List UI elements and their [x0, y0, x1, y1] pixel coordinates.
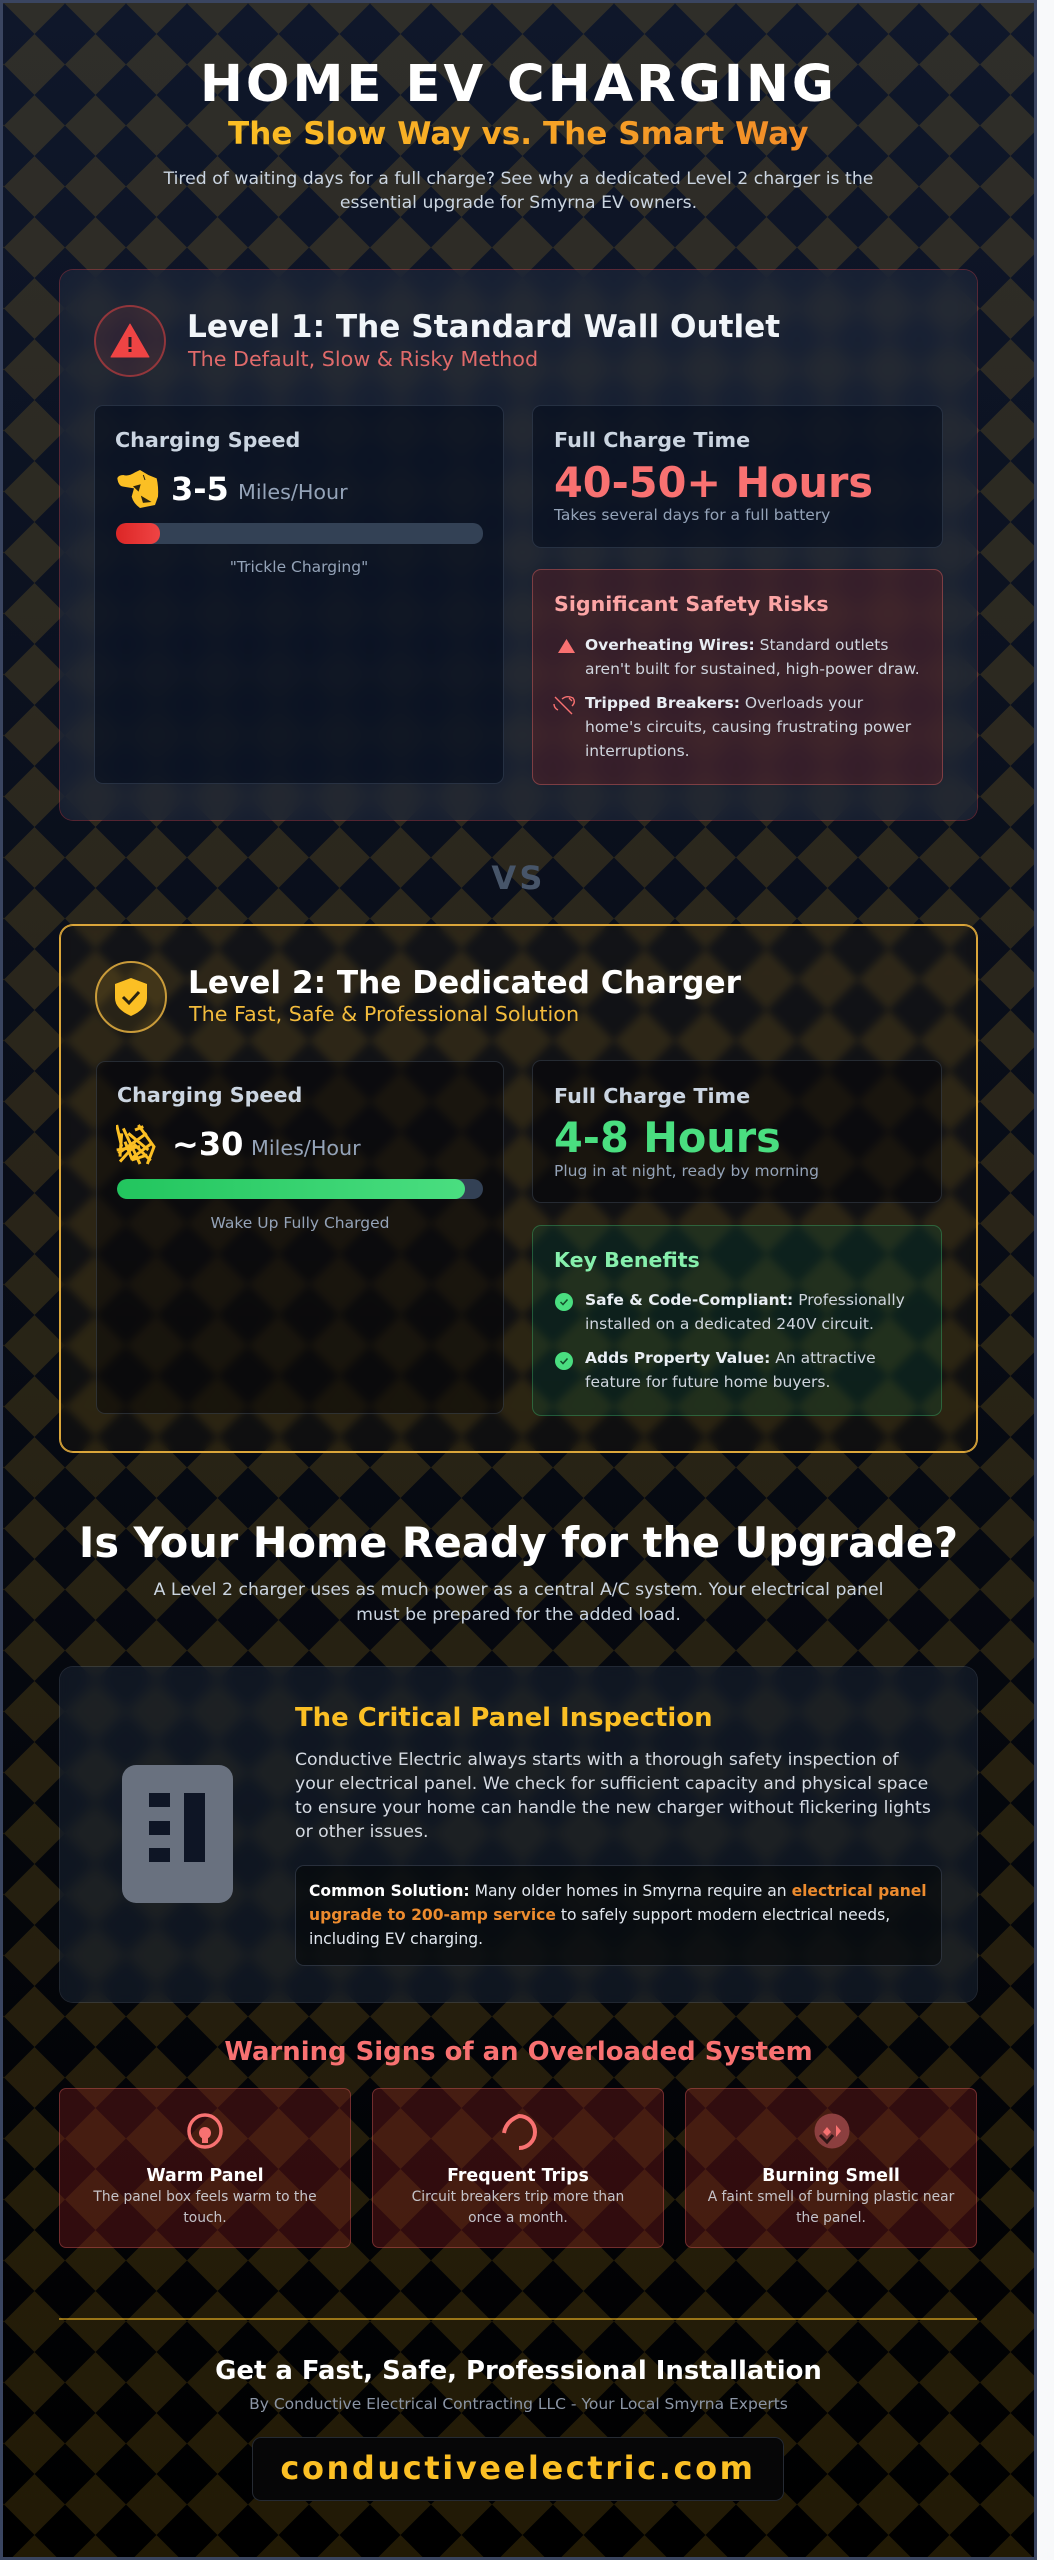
callout text: upgrade to 200-amp service to safely support modern electrical needs,: [309, 1906, 890, 1924]
caption: several days: Takes several days for a full battery: [554, 506, 830, 524]
speed bar: [117, 1179, 483, 1199]
benefit: property value: [585, 1349, 876, 1391]
heading: level 2: Level 2: The Dedicated Charger: [188, 965, 741, 1001]
callout text: including EV charging.: [309, 1930, 483, 1948]
text: burning smell: [708, 2189, 954, 2226]
title: frequent trips: Frequent Trips: [447, 2166, 589, 2186]
text: burning smell: A faint smell of burning plastic near: [708, 2189, 954, 2205]
icon: warm panel: [187, 2113, 223, 2149]
heading: safety risks: Significant Safety Risks: [554, 592, 829, 616]
label: charging speed: Charging Speed: [115, 428, 300, 452]
panel: level 2: [60, 925, 977, 1452]
risk: tripped breakers: Tripped Breakers: Overloads your: [585, 694, 863, 712]
benefit: property value: feature for future home buyers.: [585, 1373, 830, 1391]
heading: warning signs: Warning Signs of an Overloaded System: [224, 2037, 813, 2067]
caption: wake up: Wake Up Fully Charged: [211, 1214, 389, 1232]
value: ~30: ~30: [172, 1125, 243, 1163]
inspection text: or other issues.: [295, 1822, 428, 1842]
subheading: level 2: The Fast, Safe & Professional Solution: [189, 1002, 579, 1026]
inspection text: to ensure your home can handle the new charger without flickering lights: [295, 1798, 931, 1818]
subheading: level 1: The Default, Slow & Risky Method: [188, 347, 538, 371]
benefit: safe and code compliant: Safe & Code-Compliant: Professionally: [585, 1291, 905, 1309]
footer heading: Get a Fast, Safe, Professional Installation: [215, 2356, 822, 2386]
speed bar: [116, 523, 483, 544]
risk: tripped breakers: interruptions.: [585, 742, 690, 760]
icon: distorted lightning scribble: [116, 1124, 156, 1165]
icon: plug off: [553, 696, 575, 714]
panel: level 1 charging speed: [94, 405, 504, 784]
title: warm panel: Warm Panel: [146, 2166, 264, 2186]
label: full charge time: Full Charge Time: [554, 428, 750, 452]
panel: level 2 full charge time: [532, 1060, 942, 1203]
risk: overheating wires: Overheating Wires: Standard outlets: [585, 636, 888, 654]
icon: distorted plug blob: [117, 470, 158, 508]
text: warm panel: The panel box feels warm to the: [93, 2189, 317, 2205]
inspection text: your electrical panel. We check for sufficient capacity and physical space: [295, 1774, 928, 1794]
value: 3-5: 3-5: [171, 470, 229, 508]
card: warm panel: [59, 2088, 351, 2248]
text: frequent trips: [412, 2189, 624, 2226]
panel: critical panel inspection: [60, 1667, 977, 2002]
value: 40-50+ hours: 40-50+ Hours: [554, 459, 873, 507]
heading: inspection: The Critical Panel Inspection: [295, 1703, 713, 1733]
callout text: Common Solution: Many older homes in Smyrna require an electrical panel: [309, 1882, 927, 1900]
card: burning smell: [685, 2088, 977, 2248]
risk: tripped breakers: [585, 694, 912, 760]
website button: [252, 2437, 784, 2501]
inspection text: Conductive Electric always starts with a thorough safety inspection of: [295, 1750, 899, 1770]
icon: triangle: [558, 639, 575, 653]
panel: level 1: [60, 270, 977, 820]
benefit: safe and code compliant: [585, 1291, 905, 1333]
panel: safety risks: [532, 569, 943, 785]
vs divider: VS: [491, 859, 546, 897]
title: burning smell: Burning Smell: [762, 2166, 900, 2186]
text: frequent trips: Circuit breakers trip more than: [412, 2189, 624, 2205]
unit: miles per hour: Miles/Hour: [238, 480, 348, 504]
icon: burning smell: [814, 2114, 850, 2148]
callout: common solution: [295, 1865, 942, 1966]
unit: miles per hour: Miles/Hour: [251, 1136, 361, 1160]
caption: plug in: Plug in at night, ready by morning: [554, 1162, 819, 1180]
value: 4-8 hours: 4-8 Hours: [554, 1114, 781, 1162]
icon: warning triangle: [94, 305, 166, 377]
title: HOME EV CHARGING: [200, 54, 837, 114]
benefit: safe and code compliant: installed on a dedicated 240V circuit.: [585, 1315, 874, 1333]
icon: frequent trips: [502, 2114, 537, 2150]
icon: electrical panel: [122, 1765, 233, 1903]
callout text: [309, 1882, 927, 1948]
intro text: Tired of waiting days for a full charge? See why a dedicated Level 2 charger is the: [164, 169, 873, 189]
footer byline: By Conductive Electrical Contracting LLC - Your Local Smyrna Experts: [249, 2395, 788, 2413]
panel: level 1 full charge time: [532, 405, 943, 548]
card: frequent trips: [372, 2088, 664, 2248]
bar fill: [117, 1179, 465, 1199]
text: burning smell: the panel.: [796, 2210, 866, 2226]
intro text: essential upgrade for Smyrna EV owners.: [340, 193, 697, 213]
label: full charge time: Full Charge Time: [554, 1084, 750, 1108]
text: warm panel: touch.: [183, 2210, 227, 2226]
heading: level 1: Level 1: The Standard Wall Outlet: [187, 309, 780, 345]
label: charging speed: Charging Speed: [117, 1083, 302, 1107]
panel: level 2 charging speed: [96, 1061, 504, 1414]
heading: key benefits: Key Benefits: [554, 1248, 700, 1272]
icon: shield check: [95, 961, 167, 1033]
icon: check 2: [555, 1352, 573, 1370]
website url: conductiveelectric.com: [280, 2449, 756, 2487]
subtitle: The Slow Way vs. The Smart Way: [228, 116, 808, 152]
icon: check 1: [555, 1293, 573, 1311]
upgrade intro text: must be prepared for the added load.: [356, 1605, 681, 1625]
risk: tripped breakers: home's circuits, causing frustrating power: [585, 718, 911, 736]
inspection text: [295, 1750, 931, 1842]
heading: upgrade section: Is Your Home Ready for the Upgrade?: [79, 1518, 958, 1567]
panel: key benefits: [532, 1225, 942, 1416]
upgrade intro text: [154, 1580, 883, 1625]
caption: trickle charging: "Trickle Charging": [230, 558, 368, 576]
intro text: [164, 169, 873, 213]
text: warm panel: [93, 2189, 317, 2226]
benefit: property value: Adds Property Value: An attractive: [585, 1349, 876, 1367]
risk: overheating wires: aren't built for sustained, high-power draw.: [585, 660, 920, 678]
text: frequent trips: once a month.: [468, 2210, 568, 2226]
risk: overheating wires: [585, 636, 920, 678]
bar fill: [116, 523, 160, 544]
upgrade intro text: A Level 2 charger uses as much power as a central A/C system. Your electrical panel: [154, 1580, 883, 1600]
